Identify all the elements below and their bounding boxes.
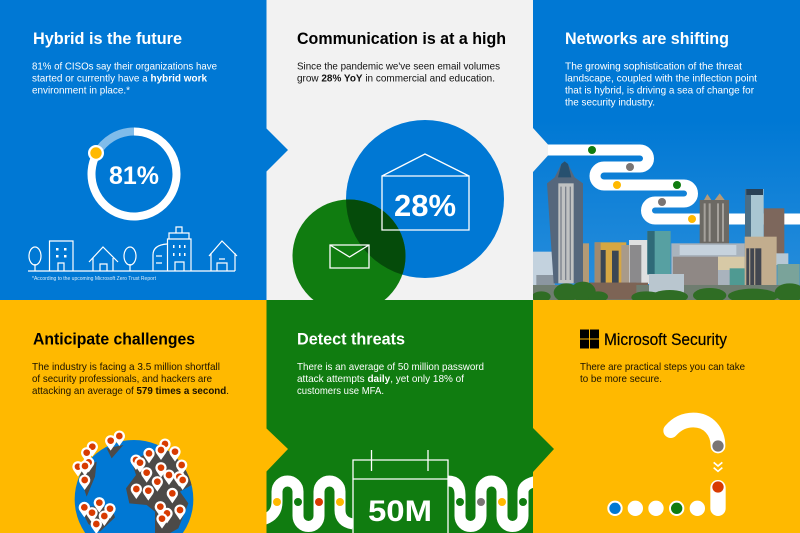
chart: password attack squiggle <box>262 481 537 526</box>
panel: detect threats <box>262 300 537 533</box>
chart: 81% ring <box>88 132 176 216</box>
photo: city skyline <box>532 161 800 303</box>
arrow: green into yellow <box>533 428 554 472</box>
text: networks body <box>565 60 757 108</box>
icon: calendar with 50M: 50M <box>368 495 432 528</box>
icon: calendar with 50M <box>353 450 448 533</box>
text: hybrid body: started or currently have a hybrid work <box>32 72 207 84</box>
icon: town skyline <box>28 227 237 271</box>
text: steps body <box>580 361 745 385</box>
text: hybrid body: 81% of CISOs say their organizations have <box>32 60 217 72</box>
panel: anticipate challenges <box>0 300 267 533</box>
heading: anticipate: Anticipate challenges <box>33 330 195 348</box>
text: detect body <box>297 361 484 397</box>
chart: steps path <box>607 420 724 516</box>
text: anticipate body: The industry is facing a 3.5 million shortfall <box>32 361 220 373</box>
text: footnote: *According to the upcoming Microsoft Zero Trust Report <box>32 276 157 282</box>
icon: small envelope <box>330 245 369 268</box>
chart: overlapping circles <box>292 120 504 312</box>
panel: microsoft security <box>533 300 800 533</box>
text: networks body: The growing sophistication of the threat <box>565 60 742 72</box>
text: detect body: There is an average of 50 million password <box>297 361 484 373</box>
arrow: yellow into green <box>266 428 288 472</box>
arrow: grey into blue <box>533 128 553 172</box>
text: hybrid body: environment in place.* <box>32 84 130 96</box>
logo: microsoft security: Microsoft Security <box>604 330 727 349</box>
text: communication body: Since the pandemic we've seen email volumes <box>297 60 500 72</box>
text: networks body: the security industry. <box>565 96 655 108</box>
arrow: blue into grey <box>266 128 288 172</box>
icon: globe with attack pins <box>72 430 193 533</box>
text: detect body: customers use MFA. <box>297 385 384 397</box>
panel: communication is at a high <box>266 0 533 312</box>
heading: hybrid: Hybrid is the future <box>33 29 182 48</box>
text: detect body: attack attempts daily, yet only 18% of <box>297 373 464 385</box>
icon: large envelope with 28%: 28% <box>394 188 456 223</box>
text: hybrid body <box>32 60 217 96</box>
text: communication body <box>297 60 500 84</box>
chart: 81% ring: 81% <box>109 162 159 190</box>
text: anticipate body: attacking an average of 579 times a second. <box>32 385 229 397</box>
heading: communication: Communication is at a high <box>297 29 506 48</box>
panel: networks are shifting <box>532 0 800 303</box>
panel: hybrid is the future <box>0 0 267 300</box>
text: steps body: to be more secure. <box>580 373 662 385</box>
text: steps body: There are practical steps you can take <box>580 361 745 373</box>
text: anticipate body <box>32 361 229 397</box>
text: communication body: grow 28% YoY in commercial and education. <box>297 72 495 84</box>
heading: networks: Networks are shifting <box>565 29 729 48</box>
heading: detect: Detect threats <box>297 330 405 348</box>
network ribbon <box>548 146 800 223</box>
text: networks body: landscape, coupled with the inflection point <box>565 72 757 84</box>
text: networks body: that is hybrid, is driving a sea of change for <box>565 84 754 96</box>
icon: large envelope with 28% <box>382 154 469 230</box>
text: anticipate body: of security professionals, and hackers are <box>32 373 212 385</box>
